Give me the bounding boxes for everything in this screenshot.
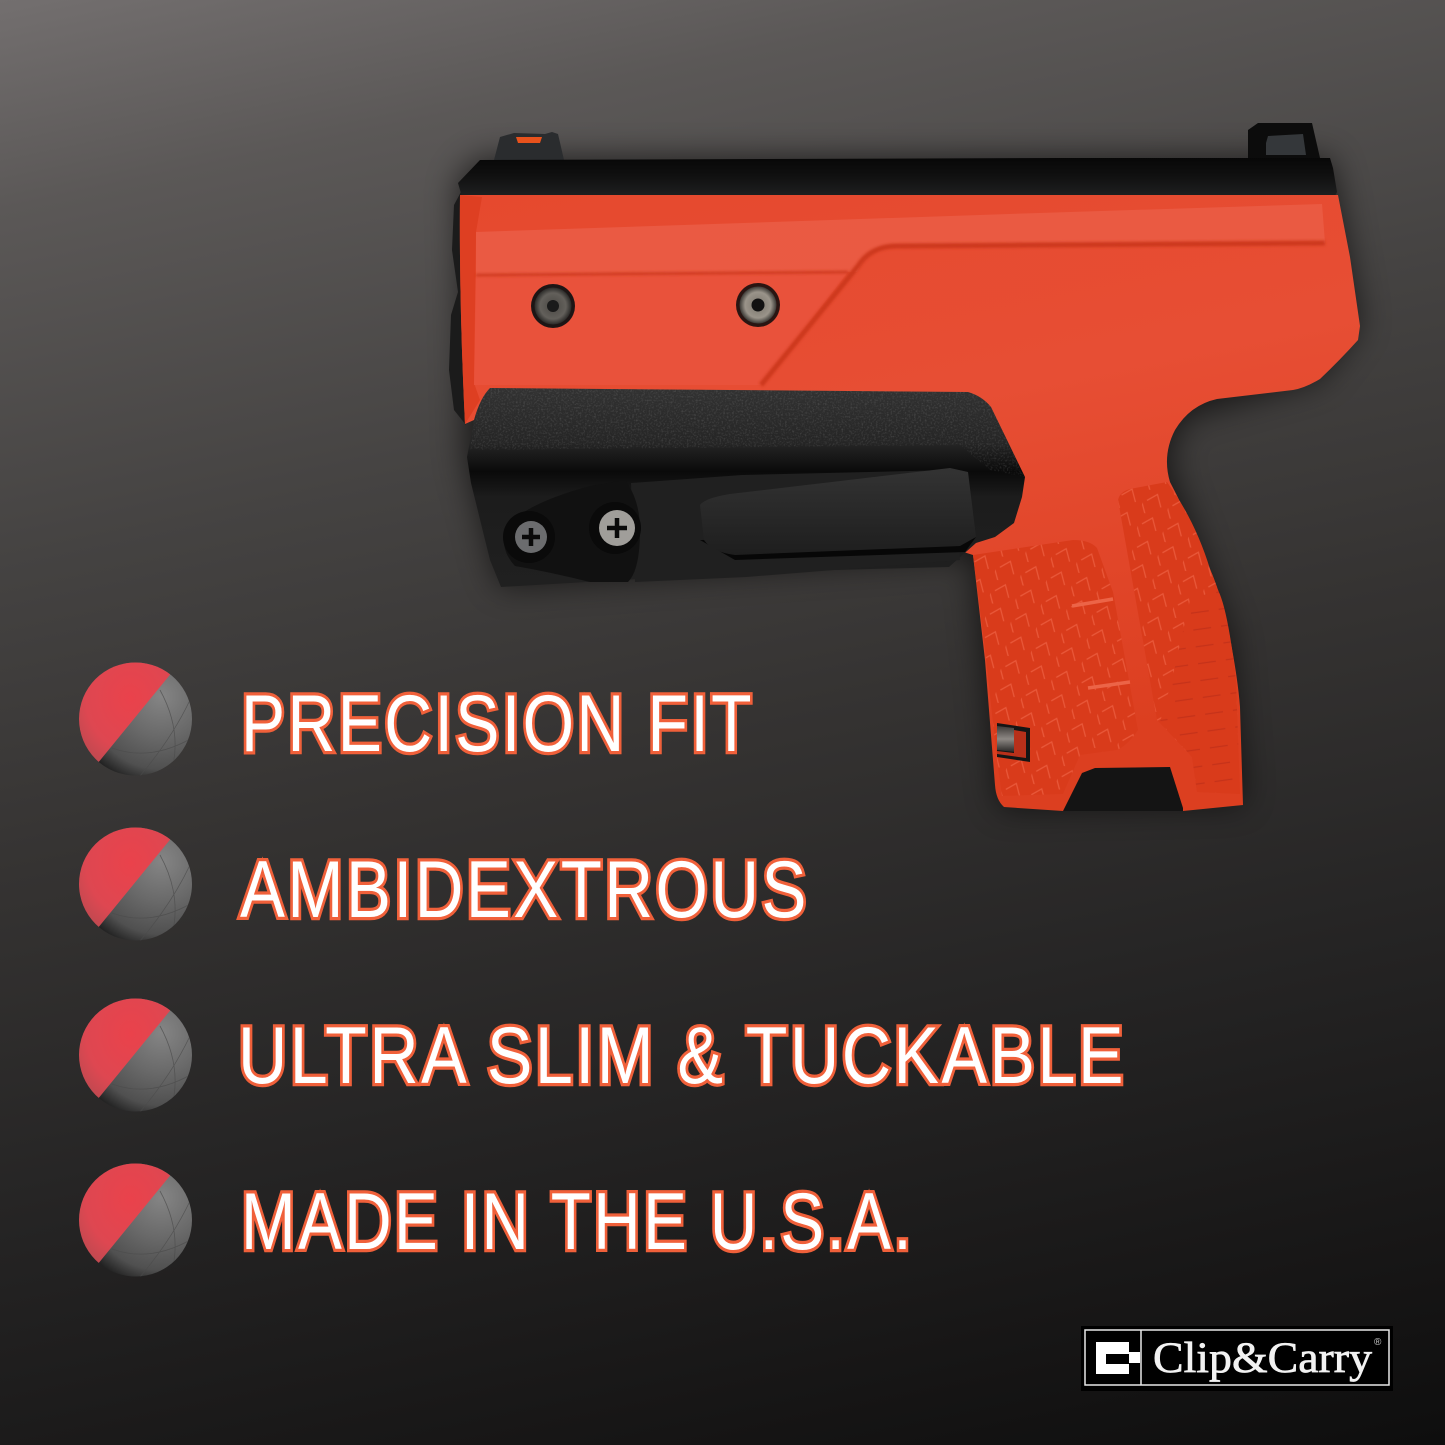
muzzle (449, 190, 470, 425)
registered mark: ® (1374, 1337, 1382, 1348)
screw one (503, 511, 555, 563)
clip pivot arm (504, 480, 640, 582)
takedown screw right (736, 283, 780, 327)
holster texture (470, 388, 1025, 477)
magazine base (1063, 767, 1183, 811)
magazine window (997, 723, 1030, 762)
bullet icon 4 (79, 1161, 193, 1281)
bullet icon 2 (79, 825, 193, 945)
clip paddle (700, 468, 976, 555)
bullet icon 1 (79, 660, 193, 780)
clip plate (631, 470, 960, 582)
front sight (494, 132, 564, 160)
screw two (589, 502, 641, 554)
pistol in holster (449, 123, 1360, 811)
frame grooves (476, 243, 1325, 385)
feature: ambidextrous: AMBIDEXTROUS (240, 845, 809, 935)
feature: made in the usa: MADE IN THE U.S.A. (241, 1177, 914, 1267)
upper frame band (476, 204, 1325, 275)
feature: precision fit: PRECISION FIT (241, 679, 754, 769)
orange frame (460, 195, 1360, 811)
rear sight (1248, 123, 1320, 158)
frame left bevel (460, 195, 482, 424)
slide (458, 158, 1337, 197)
magazine window orange (997, 730, 1026, 758)
front grip texture panel (973, 540, 1138, 796)
logo wordmark: Clip&Carry (1153, 1335, 1373, 1382)
logo mark (1096, 1342, 1140, 1374)
takedown screw left (531, 284, 575, 328)
logo: Clip&Carry (1081, 1326, 1393, 1391)
feature: ultra slim and tuckable: ULTRA SLIM & TUCKABLE (238, 1011, 1126, 1101)
pistol shadow (458, 158, 1360, 808)
lower frame face (474, 272, 848, 385)
clip paddle shadow (700, 537, 976, 560)
rear grip dash texture (1160, 590, 1240, 794)
magazine window metal (997, 726, 1014, 752)
rear grip texture panel (1118, 482, 1240, 794)
bullet icon 3 (79, 996, 193, 1116)
holster shell (467, 388, 1025, 587)
grip finger slits (1072, 599, 1130, 688)
